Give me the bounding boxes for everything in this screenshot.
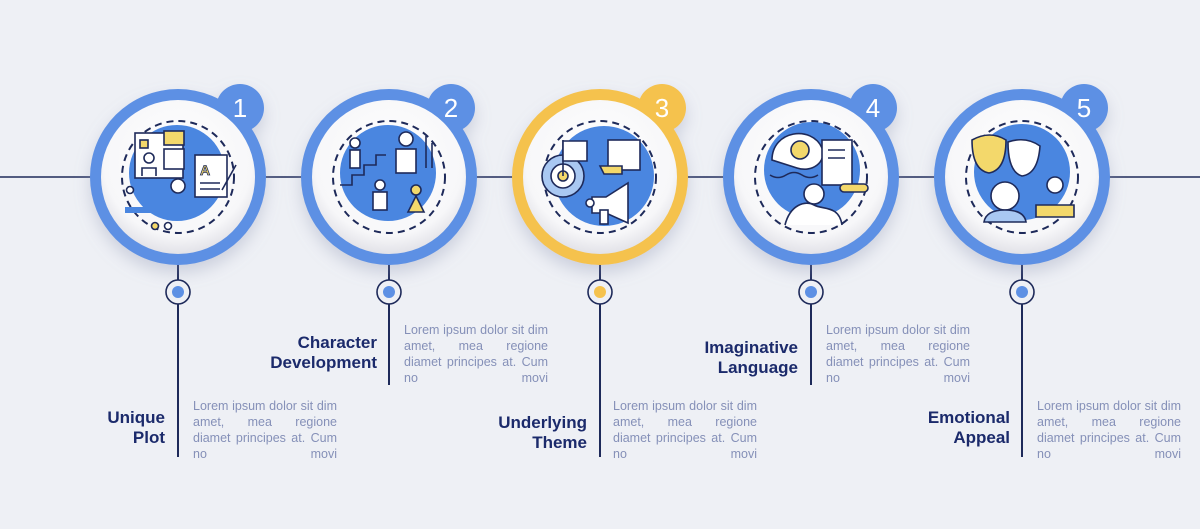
title: Imaginative Language — [704, 338, 798, 377]
icon: people stairs — [340, 132, 432, 212]
text: body 3: Lorem ipsum dolor sit dim amet, mea regione diamet principes at. Cum no movi — [613, 399, 757, 461]
title: Character Development: Development — [270, 353, 377, 372]
text: body 5: Lorem ipsum dolor sit dim amet, mea regione diamet principes at. Cum no movi — [1037, 399, 1181, 461]
circle 5 — [934, 84, 1110, 265]
title: Emotional Appeal — [928, 408, 1010, 447]
circle 4: 4 — [866, 93, 880, 123]
title: Unique Plot — [107, 408, 165, 447]
title: Unique Plot: Plot — [133, 428, 165, 447]
title: Underlying Theme: Underlying — [498, 413, 587, 432]
title: Imaginative Language: Imaginative — [704, 338, 798, 357]
circle 2 — [301, 84, 477, 265]
text: body 1: Lorem ipsum dolor sit dim amet, mea regione diamet principes at. Cum no movi — [193, 399, 337, 461]
title: Emotional Appeal: Appeal — [953, 428, 1010, 447]
icon: masks reader — [972, 135, 1074, 222]
circle 2: 2 — [444, 93, 458, 123]
title: Unique Plot: Unique — [107, 408, 165, 427]
icon: story board — [125, 131, 236, 230]
title: Character Development — [270, 333, 377, 372]
text: body 4: Lorem ipsum dolor sit dim amet, mea regione diamet principes at. Cum no movi — [826, 323, 970, 385]
text: body 2: Lorem ipsum dolor sit dim amet, mea regione diamet principes at. Cum no movi — [404, 323, 548, 385]
title: Underlying Theme: Theme — [532, 433, 587, 452]
nodes — [166, 280, 1034, 304]
circle 3: 3 — [655, 93, 669, 123]
icon: whale lightbulb — [770, 134, 868, 225]
icon: story board: A — [200, 162, 210, 178]
title: Emotional Appeal: Emotional — [928, 408, 1010, 427]
circle 3 — [512, 84, 688, 265]
title: Character Development: Character — [298, 333, 377, 352]
title: Underlying Theme — [498, 413, 587, 452]
circle 4 — [723, 84, 899, 265]
circle 1 — [90, 84, 266, 265]
icon: target megaphone — [542, 140, 640, 224]
circle 5: 5 — [1077, 93, 1091, 123]
title: Imaginative Language: Language — [718, 358, 798, 377]
circle 1: 1 — [233, 93, 247, 123]
